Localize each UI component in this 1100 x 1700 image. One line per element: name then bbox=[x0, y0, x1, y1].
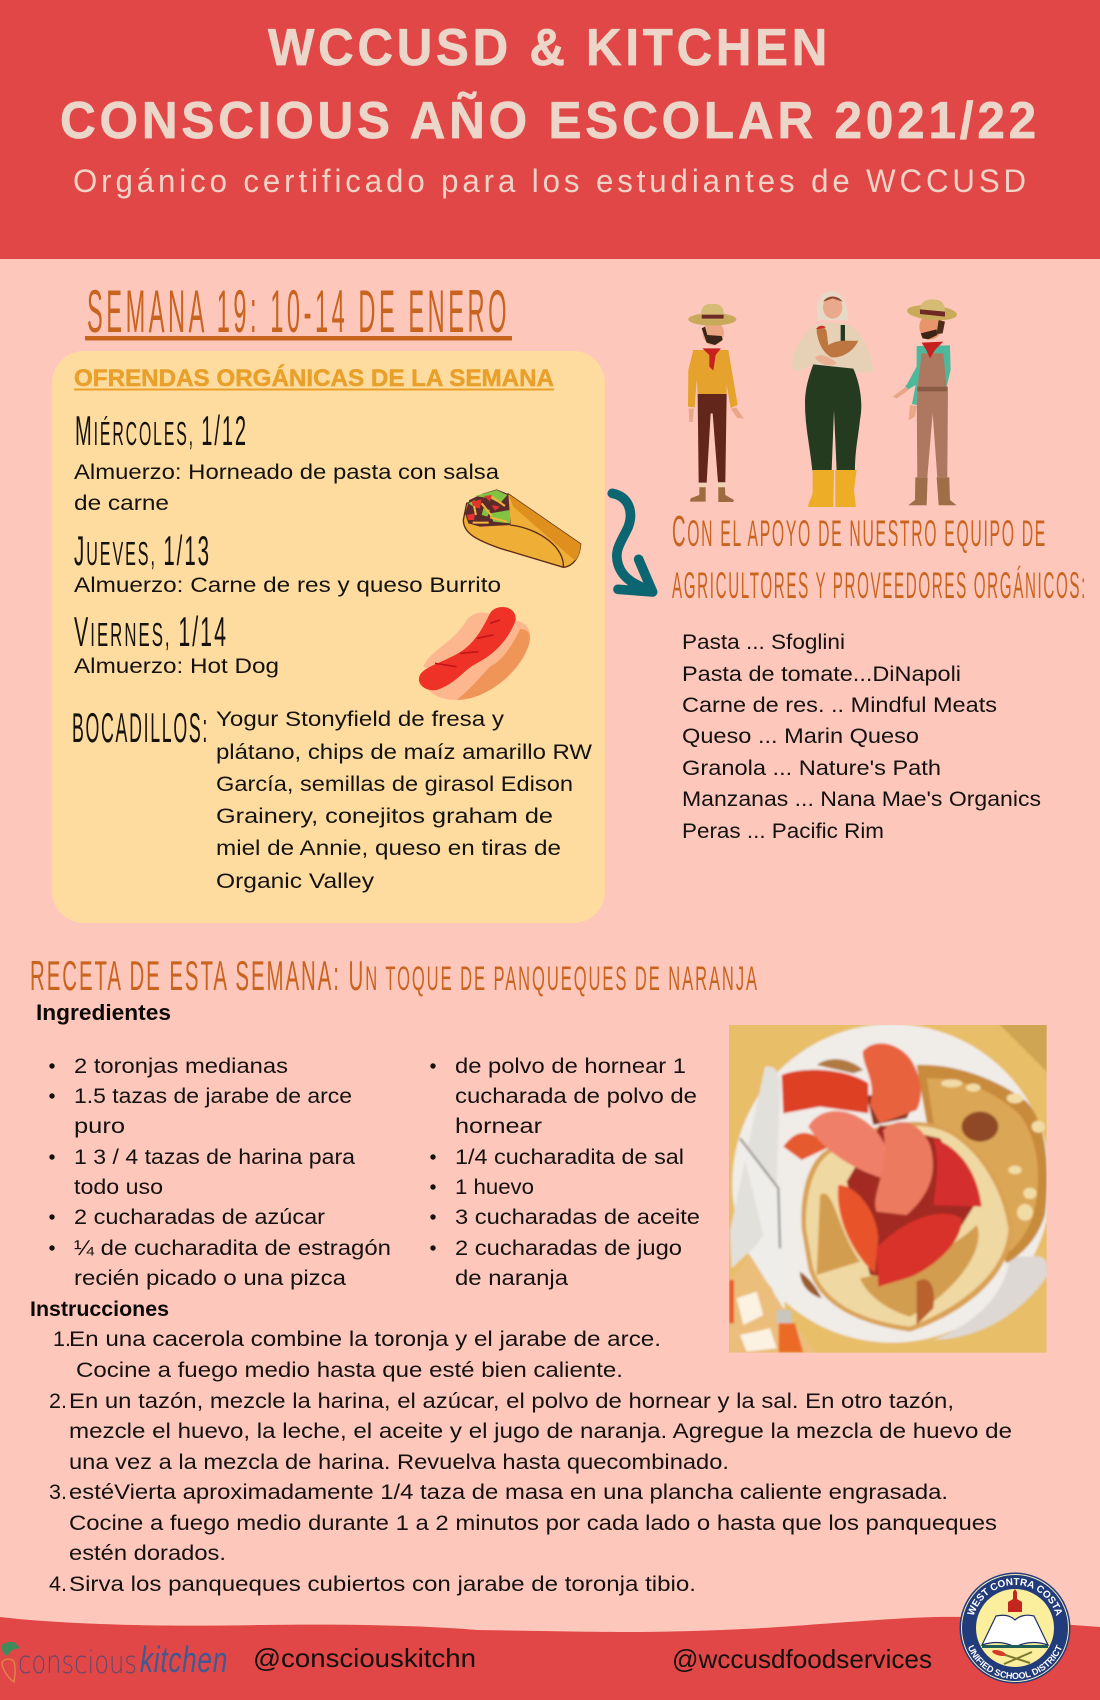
snacks text: García, semillas de girasol Edison bbox=[216, 772, 573, 796]
wednesday heading: MIÉRCOLES, 1/12 bbox=[75, 407, 248, 454]
arrow bbox=[612, 493, 653, 592]
farmer 3 bbox=[893, 299, 958, 505]
logo: conscious kitchen bbox=[1, 1639, 228, 1682]
suppliers list: Granola ... Nature's Path bbox=[682, 756, 941, 780]
back pancake bbox=[917, 1065, 1047, 1263]
instructions list bbox=[49, 1327, 1012, 1596]
ingredients column 1: puro bbox=[74, 1114, 125, 1138]
icon: carrot bbox=[1, 1642, 20, 1682]
instructions list: 3. bbox=[49, 1480, 67, 1504]
icon: hot dog bbox=[419, 607, 530, 700]
wednesday lunch: Almuerzo: Horneado de pasta con salsa bbox=[74, 460, 499, 484]
grapefruit segments bbox=[782, 1070, 868, 1113]
snacks text bbox=[216, 707, 593, 893]
handle: consciouskitchn: @consciouskitchn bbox=[253, 1643, 476, 1673]
icon: burrito bbox=[463, 489, 581, 567]
ingredients column 2: 1 huevo bbox=[455, 1175, 534, 1199]
ingredients column 2: hornear bbox=[455, 1114, 542, 1138]
ingredients column 2: cucharada de polvo de bbox=[455, 1084, 697, 1108]
friday lunch: Almuerzo: Hot Dog bbox=[74, 654, 279, 678]
footer band bbox=[0, 1617, 1100, 1700]
seal: west contra costa unified school district: UNIFIED SCHOOL DISTRICT bbox=[968, 1644, 1062, 1679]
ingredients column 1: ¼ de cucharadita de estragón bbox=[74, 1236, 391, 1260]
ingredients column 1: recién picado o una pizca bbox=[74, 1266, 346, 1290]
ingredients heading: Ingredientes bbox=[36, 1000, 171, 1025]
instructions list: 1. bbox=[53, 1327, 71, 1351]
wednesday lunch bbox=[74, 460, 499, 515]
instructions list: estén dorados. bbox=[69, 1541, 226, 1565]
logo: conscious kitchen: kitchen bbox=[140, 1639, 228, 1680]
instructions list: 4. bbox=[49, 1572, 67, 1596]
title line 1: WCCUSD & KITCHEN bbox=[268, 19, 831, 77]
photo: grapefruit pancakes bbox=[727, 1022, 1051, 1355]
snacks text: Yogur Stonyfield de fresa y bbox=[216, 707, 504, 731]
illustration: farmers bbox=[688, 291, 958, 507]
instructions list: estéVierta aproximadamente 1/4 taza de masa en una plancha caliente engrasada. bbox=[69, 1480, 948, 1504]
farmers heading bbox=[672, 507, 1087, 606]
instructions list: 2. bbox=[49, 1389, 67, 1413]
icon: schoolhouse bbox=[1008, 1589, 1022, 1612]
ingredients column 2: de naranja bbox=[455, 1266, 568, 1290]
ingredients column 2: 1/4 cucharadita de sal bbox=[455, 1145, 684, 1169]
seal: west contra costa unified school district: WEST CONTRA COSTA bbox=[967, 1578, 1062, 1616]
logo: conscious kitchen: conscious bbox=[18, 1645, 137, 1681]
instructions heading: Instrucciones bbox=[30, 1298, 169, 1321]
panel: weekly offerings: BOCADILLOS: bbox=[72, 704, 209, 751]
farmer 1 bbox=[688, 304, 744, 502]
suppliers list: Peras ... Pacific Rim bbox=[682, 819, 884, 843]
snacks text: Organic Valley bbox=[216, 869, 374, 893]
ingredients column 2 bbox=[430, 1054, 700, 1290]
farmer 2 bbox=[792, 291, 873, 507]
subtitle: Orgánico certificado para los estudiantes de WCCUSD bbox=[73, 163, 1030, 199]
suppliers list: Carne de res. .. Mindful Meats bbox=[682, 693, 997, 717]
instructions list: una vez a la mezcla de harina. Revuelva hasta quecombinado. bbox=[69, 1450, 729, 1474]
napkin bbox=[729, 1255, 817, 1353]
week heading bbox=[85, 278, 512, 345]
snacks text: Grainery, conejitos graham de bbox=[216, 804, 553, 828]
handle: wccusdfoodservices: @wccusdfoodservices bbox=[672, 1644, 932, 1674]
seal: west contra costa unified school district bbox=[960, 1572, 1070, 1684]
ingredients column 2: de polvo de hornear 1 bbox=[455, 1054, 686, 1078]
instructions list: En una cacerola combine la toronja y el jarabe de arce. bbox=[69, 1327, 661, 1351]
header band bbox=[0, 0, 1100, 259]
instructions list: Cocine a fuego medio durante 1 a 2 minutos por cada lado o hasta que los panqueques bbox=[69, 1511, 997, 1535]
grapefruit underlay bbox=[847, 1125, 977, 1278]
thursday heading: JUEVES, 1/13 bbox=[74, 527, 211, 574]
wednesday lunch: de carne bbox=[74, 491, 169, 515]
ingredients column 1: 1 3 / 4 tazas de harina para bbox=[74, 1145, 355, 1169]
thursday lunch: Almuerzo: Carne de res y queso Burrito bbox=[74, 573, 501, 597]
ingredients column 1: 2 cucharadas de azúcar bbox=[74, 1205, 325, 1229]
ingredients column 1: 1.5 tazas de jarabe de arce bbox=[74, 1084, 352, 1108]
suppliers list: Queso ... Marin Queso bbox=[682, 724, 919, 748]
front pancake bbox=[801, 1122, 1013, 1332]
knife and fork bbox=[730, 1066, 780, 1268]
panel: weekly offerings bbox=[52, 351, 605, 923]
icon: open book bbox=[982, 1615, 1048, 1648]
snacks text: plátano, chips de maíz amarillo RW bbox=[216, 740, 593, 764]
title line 2: CONSCIOUS AÑO ESCOLAR 2021/22 bbox=[60, 91, 1040, 150]
instructions list: Sirva los panqueques cubiertos con jarabe de toronja tibio. bbox=[69, 1572, 696, 1596]
instructions list: mezcle el huevo, la leche, el aceite y el jugo de naranja. Agregue la mezcla de huevo de bbox=[69, 1419, 1012, 1443]
suppliers list: Pasta ... Sfoglini bbox=[682, 630, 845, 654]
ingredients column 2: 3 cucharadas de aceite bbox=[455, 1205, 700, 1229]
instructions list: Cocine a fuego medio hasta que esté bien caliente. bbox=[76, 1358, 623, 1382]
friday heading: VIERNES, 1/14 bbox=[74, 608, 228, 655]
ingredients column 1: todo uso bbox=[74, 1175, 163, 1199]
suppliers list: Pasta de tomate...DiNapoli bbox=[682, 662, 961, 686]
ingredients column 2: 2 cucharadas de jugo bbox=[455, 1236, 682, 1260]
ingredients column 1: 2 toronjas medianas bbox=[74, 1054, 288, 1078]
panel heading: OFRENDAS ORGÁNICAS DE LA SEMANA bbox=[74, 364, 554, 392]
suppliers list: Manzanas ... Nana Mae's Organics bbox=[682, 787, 1041, 811]
ingredients column 1 bbox=[49, 1054, 391, 1290]
instructions list: En un tazón, mezcle la harina, el azúcar, el polvo de hornear y la sal. En otro tazón, bbox=[69, 1389, 954, 1413]
suppliers list bbox=[682, 630, 1041, 843]
snacks text: miel de Annie, queso en tiras de bbox=[216, 836, 561, 860]
